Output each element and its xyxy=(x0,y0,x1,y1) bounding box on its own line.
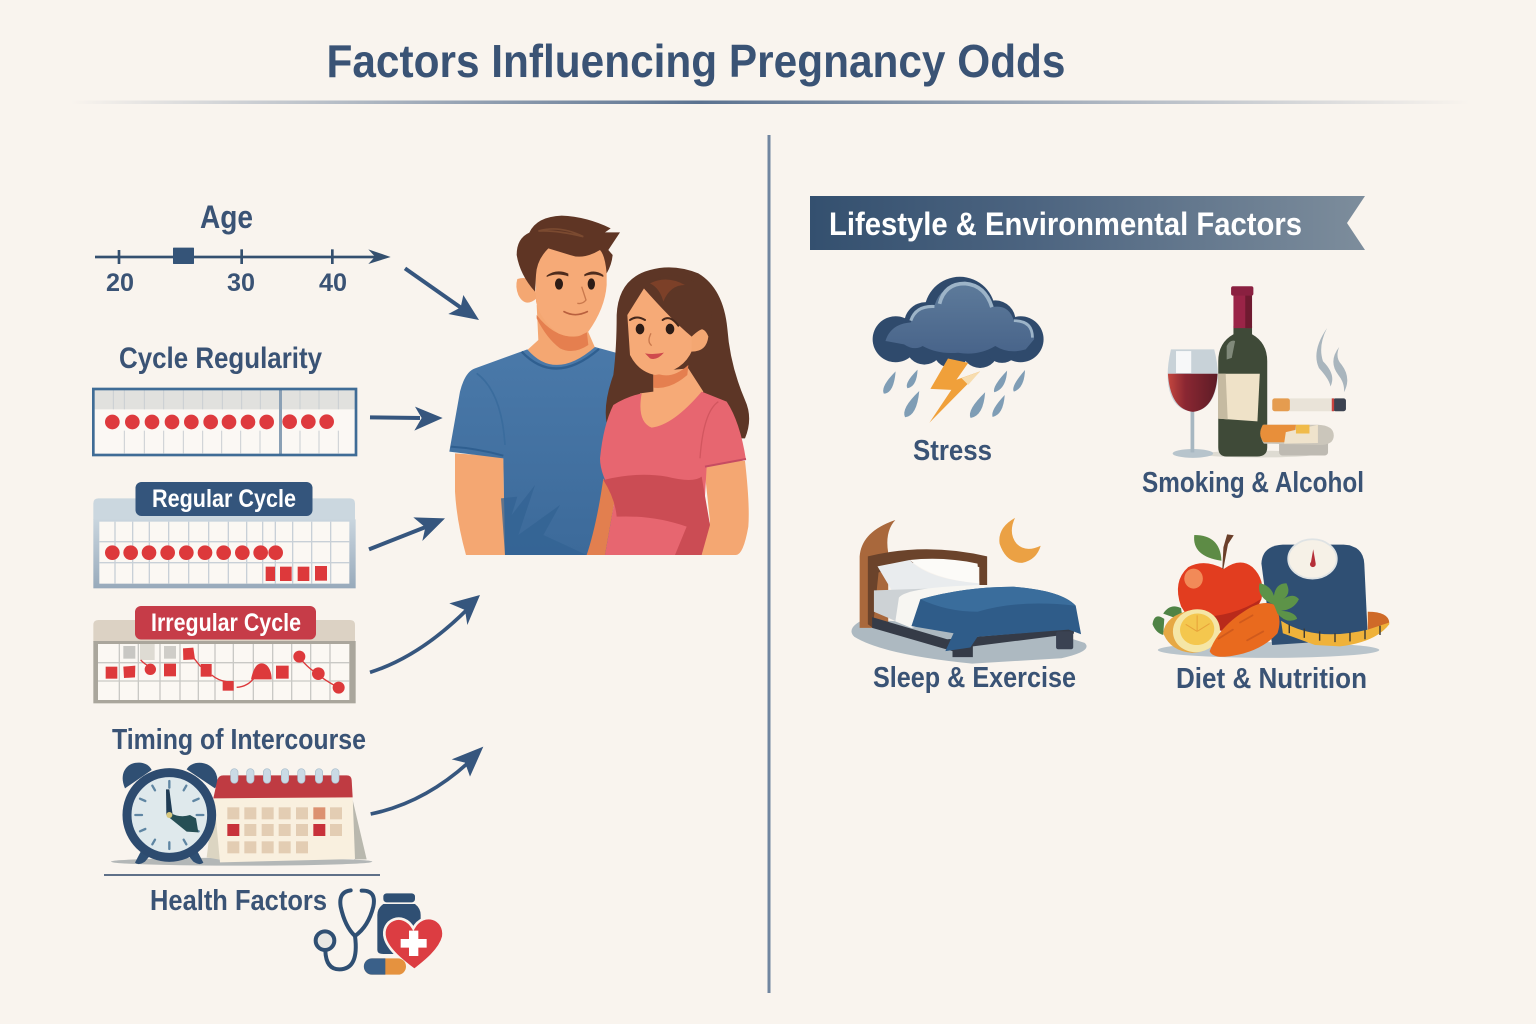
man xyxy=(449,216,620,555)
age labels: 30 xyxy=(227,269,255,297)
age labels xyxy=(106,269,347,297)
panel: cycle regularity xyxy=(93,342,356,455)
label: sleep and exercise: Sleep & Exercise xyxy=(873,662,1076,694)
icon: storm cloud xyxy=(873,277,1044,423)
label: diet and nutrition: Diet & Nutrition xyxy=(1176,663,1367,695)
chart: cycle regularity strip xyxy=(93,389,356,455)
banner: lifestyle and environmental factors xyxy=(810,196,1365,250)
icon: wine, bottle and cigarettes xyxy=(1168,286,1347,458)
arrow: age to couple xyxy=(405,268,479,320)
arrow: irregular cycle to couple xyxy=(370,595,480,672)
heading: health factors: Health Factors xyxy=(150,885,327,917)
arrow: timing to couple xyxy=(371,747,483,814)
heading: cycle regularity: Cycle Regularity xyxy=(119,342,322,375)
panel: irregular cycle xyxy=(93,606,356,703)
panel: diet and nutrition xyxy=(1152,535,1389,695)
arrow: regular cycle to couple xyxy=(369,517,445,549)
heading: age: Age xyxy=(200,199,253,235)
age labels: 40 xyxy=(319,269,347,297)
banner: lifestyle and environmental factors: Lifestyle & Environmental Factors xyxy=(829,206,1302,242)
icon: clock and calendar xyxy=(111,763,372,866)
calendar: irregular cycle xyxy=(93,620,356,703)
title: Factors Influencing Pregnancy Odds xyxy=(326,35,1066,87)
illustration: couple xyxy=(449,216,749,555)
icon: bed and moon xyxy=(851,518,1087,664)
badge: regular cycle: Regular Cycle xyxy=(152,485,296,513)
age labels: 20 xyxy=(106,269,134,297)
panel: health factors xyxy=(150,885,444,975)
panel: timing of intercourse xyxy=(104,724,380,876)
panel: smoking and alcohol xyxy=(1142,286,1364,499)
label: stress: Stress xyxy=(913,435,992,467)
icon: apple, lemon, carrot, scale and tape xyxy=(1152,535,1389,658)
heading: timing of intercourse: Timing of Intercourse xyxy=(112,724,366,756)
woman xyxy=(587,267,749,555)
label: smoking and alcohol: Smoking & Alcohol xyxy=(1142,467,1364,499)
badge: irregular cycle: Irregular Cycle xyxy=(151,609,301,637)
arrow: cycle regularity to couple xyxy=(370,407,443,431)
panel: sleep and exercise xyxy=(851,518,1087,694)
icon: stethoscope, bottle, heart and pill xyxy=(316,890,444,975)
age timeline xyxy=(95,248,391,264)
calendar: regular cycle xyxy=(93,498,356,588)
panel: age xyxy=(95,199,391,297)
panel: regular cycle xyxy=(93,482,356,588)
panel: stress xyxy=(873,277,1044,467)
